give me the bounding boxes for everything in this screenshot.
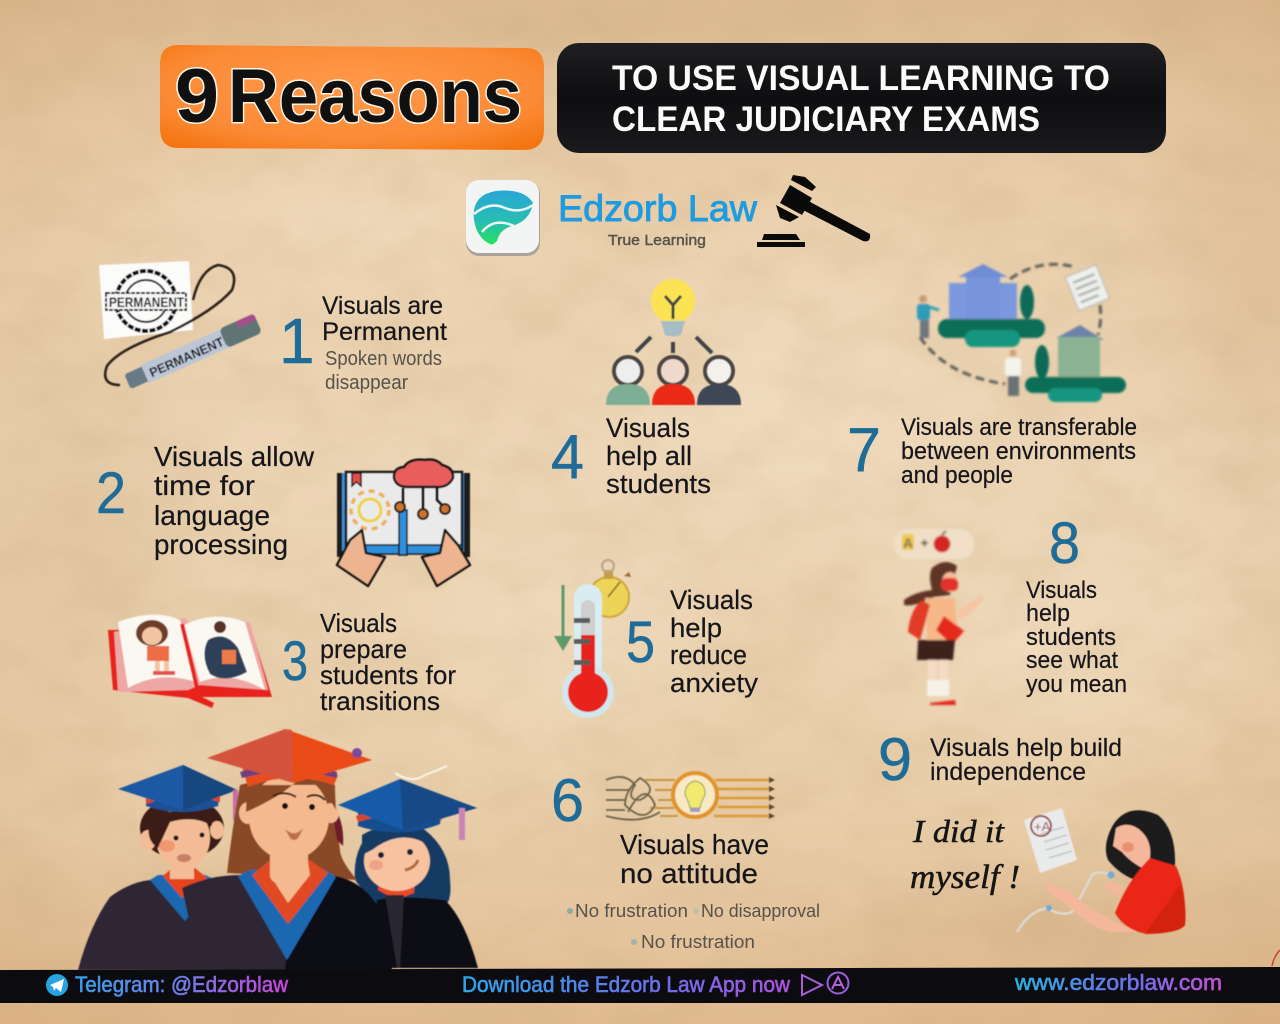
text: time for language processing: time for [154, 470, 255, 501]
icon: idea shared by three people [606, 279, 741, 405]
number 3: 3 [282, 629, 308, 692]
text: see what you mean: Visuals [1026, 577, 1097, 604]
icon: gavel [757, 175, 870, 247]
text: build independence: Visuals help build [930, 734, 1122, 762]
text: help all students: students [606, 469, 711, 499]
text: visuals are permanent: Spoken words [325, 348, 442, 370]
text: prepare students for transitions: transitions [320, 686, 440, 716]
icon: thermometer and stopwatch [554, 560, 631, 718]
icon: store badges [802, 972, 848, 995]
text: help reduce anxiety [670, 585, 758, 698]
tagline: True Learning [608, 232, 706, 249]
bullet list [567, 901, 820, 952]
text: see what you mean: see what [1026, 647, 1118, 674]
number 9: 9 [878, 726, 912, 793]
reason 5 [554, 560, 758, 718]
logo: Edzorb Law [466, 175, 870, 256]
text: visuals are permanent: Visuals are [322, 292, 443, 320]
icon: brain in open book with hands [337, 460, 470, 586]
text: prepare students for transitions: prepare [320, 634, 407, 664]
number 4: 4 [551, 423, 584, 492]
text: time for language processing: processing [154, 529, 288, 560]
text: see what you mean: students [1026, 624, 1116, 651]
text: no attitude: no attitude [620, 858, 758, 889]
illustration: three graduates [78, 729, 478, 970]
handwriting: I did it myself [910, 813, 1020, 896]
icon: woman with graded paper [1017, 808, 1185, 934]
text: time for language processing: language [154, 500, 270, 531]
text: no attitude: Visuals have [620, 829, 769, 860]
bullet list: No frustration [641, 932, 755, 952]
icon: transfer between school and home [917, 264, 1126, 402]
text: prepare students for transitions: students for [320, 660, 456, 690]
title badge: 9 Reasons: Reasons [228, 54, 522, 139]
text: see what you mean [1026, 577, 1127, 698]
footer bar [0, 967, 1280, 1003]
handwriting: I did it myself: myself ! [910, 859, 1020, 896]
text: visuals are permanent: Permanent [322, 318, 447, 346]
icon: permanent stamp and marker: PERMANENT [147, 334, 226, 380]
icon: app logo [466, 180, 540, 256]
graduate: right girl [338, 779, 478, 968]
text: visuals are permanent: disappear [325, 372, 408, 394]
reason 7 [847, 264, 1137, 489]
title badge: 9 Reasons [160, 45, 544, 150]
reason 9 [878, 726, 1185, 934]
reason 8 [894, 511, 1127, 705]
text: help all students: help all [606, 441, 692, 471]
text: help reduce anxiety: anxiety [670, 668, 758, 698]
number 1: 1 [279, 305, 315, 377]
text: build independence: independence [930, 758, 1086, 786]
title banner: to use visual learning [557, 43, 1166, 153]
icon: tangled lines through light bulb [606, 773, 775, 820]
graduate: centre woman [182, 729, 392, 970]
text: transferable: and people [901, 462, 1013, 489]
bullet list: No frustration [575, 901, 688, 921]
icon: permanent stamp and marker [99, 261, 262, 391]
text: transferable: Visuals are transferable [901, 414, 1137, 441]
text: see what you mean: help [1026, 600, 1070, 627]
icon: telegram [46, 974, 68, 996]
text: help all students [606, 413, 711, 499]
website: www.edzorblaw.com [1014, 970, 1222, 995]
app download call to action: Download the Edzorb Law App now [462, 972, 790, 997]
reason 4 [551, 279, 741, 499]
reason 2 [96, 441, 470, 586]
text: visuals are permanent [322, 292, 447, 394]
text: help all students: Visuals [606, 413, 690, 443]
icon: woman with graded paper: +A [1034, 819, 1051, 834]
text: help reduce anxiety: reduce [670, 640, 747, 670]
icon: permanent stamp and marker: PERMANENT [109, 294, 184, 310]
text: transferable [901, 414, 1137, 489]
number 7: 7 [847, 416, 881, 485]
reason 1 [99, 261, 447, 394]
reason 3 [108, 608, 456, 716]
bullet list: No disapproval [701, 901, 820, 921]
text: no attitude [620, 829, 769, 889]
text: see what you mean: you mean [1026, 671, 1127, 698]
brand name: Edzorb Law [558, 188, 757, 229]
white squiggle [395, 766, 447, 779]
number 2: 2 [96, 461, 126, 526]
handwriting: I did it myself: I did it [912, 813, 1005, 849]
number 6: 6 [551, 767, 584, 834]
number 8: 8 [1049, 511, 1080, 576]
title banner: to use visual learning: TO USE VISUAL LEARNING TO [612, 59, 1110, 98]
reason 6 [551, 767, 820, 952]
text: transferable: between environments [901, 438, 1136, 465]
text: time for language processing: Visuals allow [154, 441, 315, 472]
text: help reduce anxiety: Visuals [670, 585, 753, 615]
text: time for language processing [154, 441, 315, 560]
icon: student girl with books [894, 529, 984, 705]
text: prepare students for transitions [320, 608, 456, 716]
title badge: 9 Reasons: 9 [175, 54, 219, 139]
text: build independence [930, 734, 1122, 786]
title banner: to use visual learning: CLEAR JUDICIARY EXAMS [612, 100, 1040, 139]
icon: student girl with books: A [903, 535, 913, 551]
text: help reduce anxiety: help [670, 613, 722, 643]
telegram handle: Telegram: @Edzorblaw [75, 972, 288, 997]
graduate: left boy [78, 765, 250, 970]
number 5: 5 [626, 610, 655, 675]
icon: open photo book [108, 614, 272, 708]
text: prepare students for transitions: Visuals [320, 608, 397, 638]
